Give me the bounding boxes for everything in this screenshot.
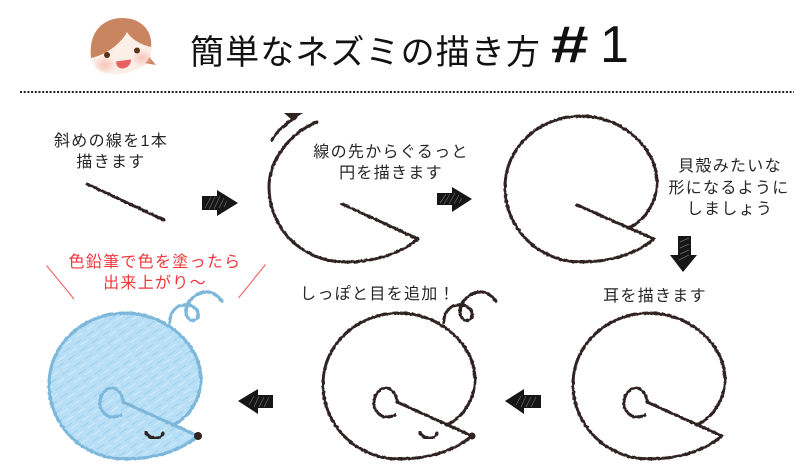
step 1 text: 描きます <box>76 153 146 171</box>
step 2 text: 円を描きます <box>339 164 443 182</box>
arrow: step 1 to 2 <box>202 190 238 216</box>
red caption: 色鉛筆で色を塗ったら <box>68 253 242 271</box>
step 4 text: 耳を描きます <box>603 287 707 305</box>
arrow: step 3 to 4 <box>670 236 697 272</box>
step 2 text <box>313 143 469 182</box>
step 3 text: 貝殻みたいな <box>678 157 782 175</box>
step 3 text: 形になるように <box>668 179 790 197</box>
step 3: shell shape <box>505 116 657 262</box>
step 2: drawing the circle <box>269 113 418 262</box>
title <box>190 15 629 74</box>
step 6: coloured mouse <box>49 292 222 459</box>
step 4: mouse with ear <box>573 313 725 459</box>
step 1 text: 斜めの線を1本 <box>54 132 168 150</box>
title: # <box>550 15 588 73</box>
icon: girl face <box>91 18 156 75</box>
step 5: mouse with tail and eye <box>323 292 496 459</box>
red caption <box>68 253 242 292</box>
title: 簡単なネズミの描き方 <box>190 34 541 72</box>
step 1: diagonal line <box>87 184 164 220</box>
red caption: 出来上がり〜 <box>103 274 207 292</box>
step 5 text: しっぽと目を追加！ <box>300 285 456 303</box>
step 2 text: 線の先からぐるっと <box>313 143 469 161</box>
red accent lines <box>46 264 266 299</box>
arrow: step 2 to 3 <box>437 187 472 212</box>
step 3 text: しましょう <box>687 201 773 218</box>
step 1 text <box>54 132 168 171</box>
title: 1 <box>600 16 629 74</box>
step 3 text <box>668 157 790 218</box>
arrow: step 5 to 6 <box>238 389 273 414</box>
arrow: step 4 to 5 <box>505 389 541 414</box>
